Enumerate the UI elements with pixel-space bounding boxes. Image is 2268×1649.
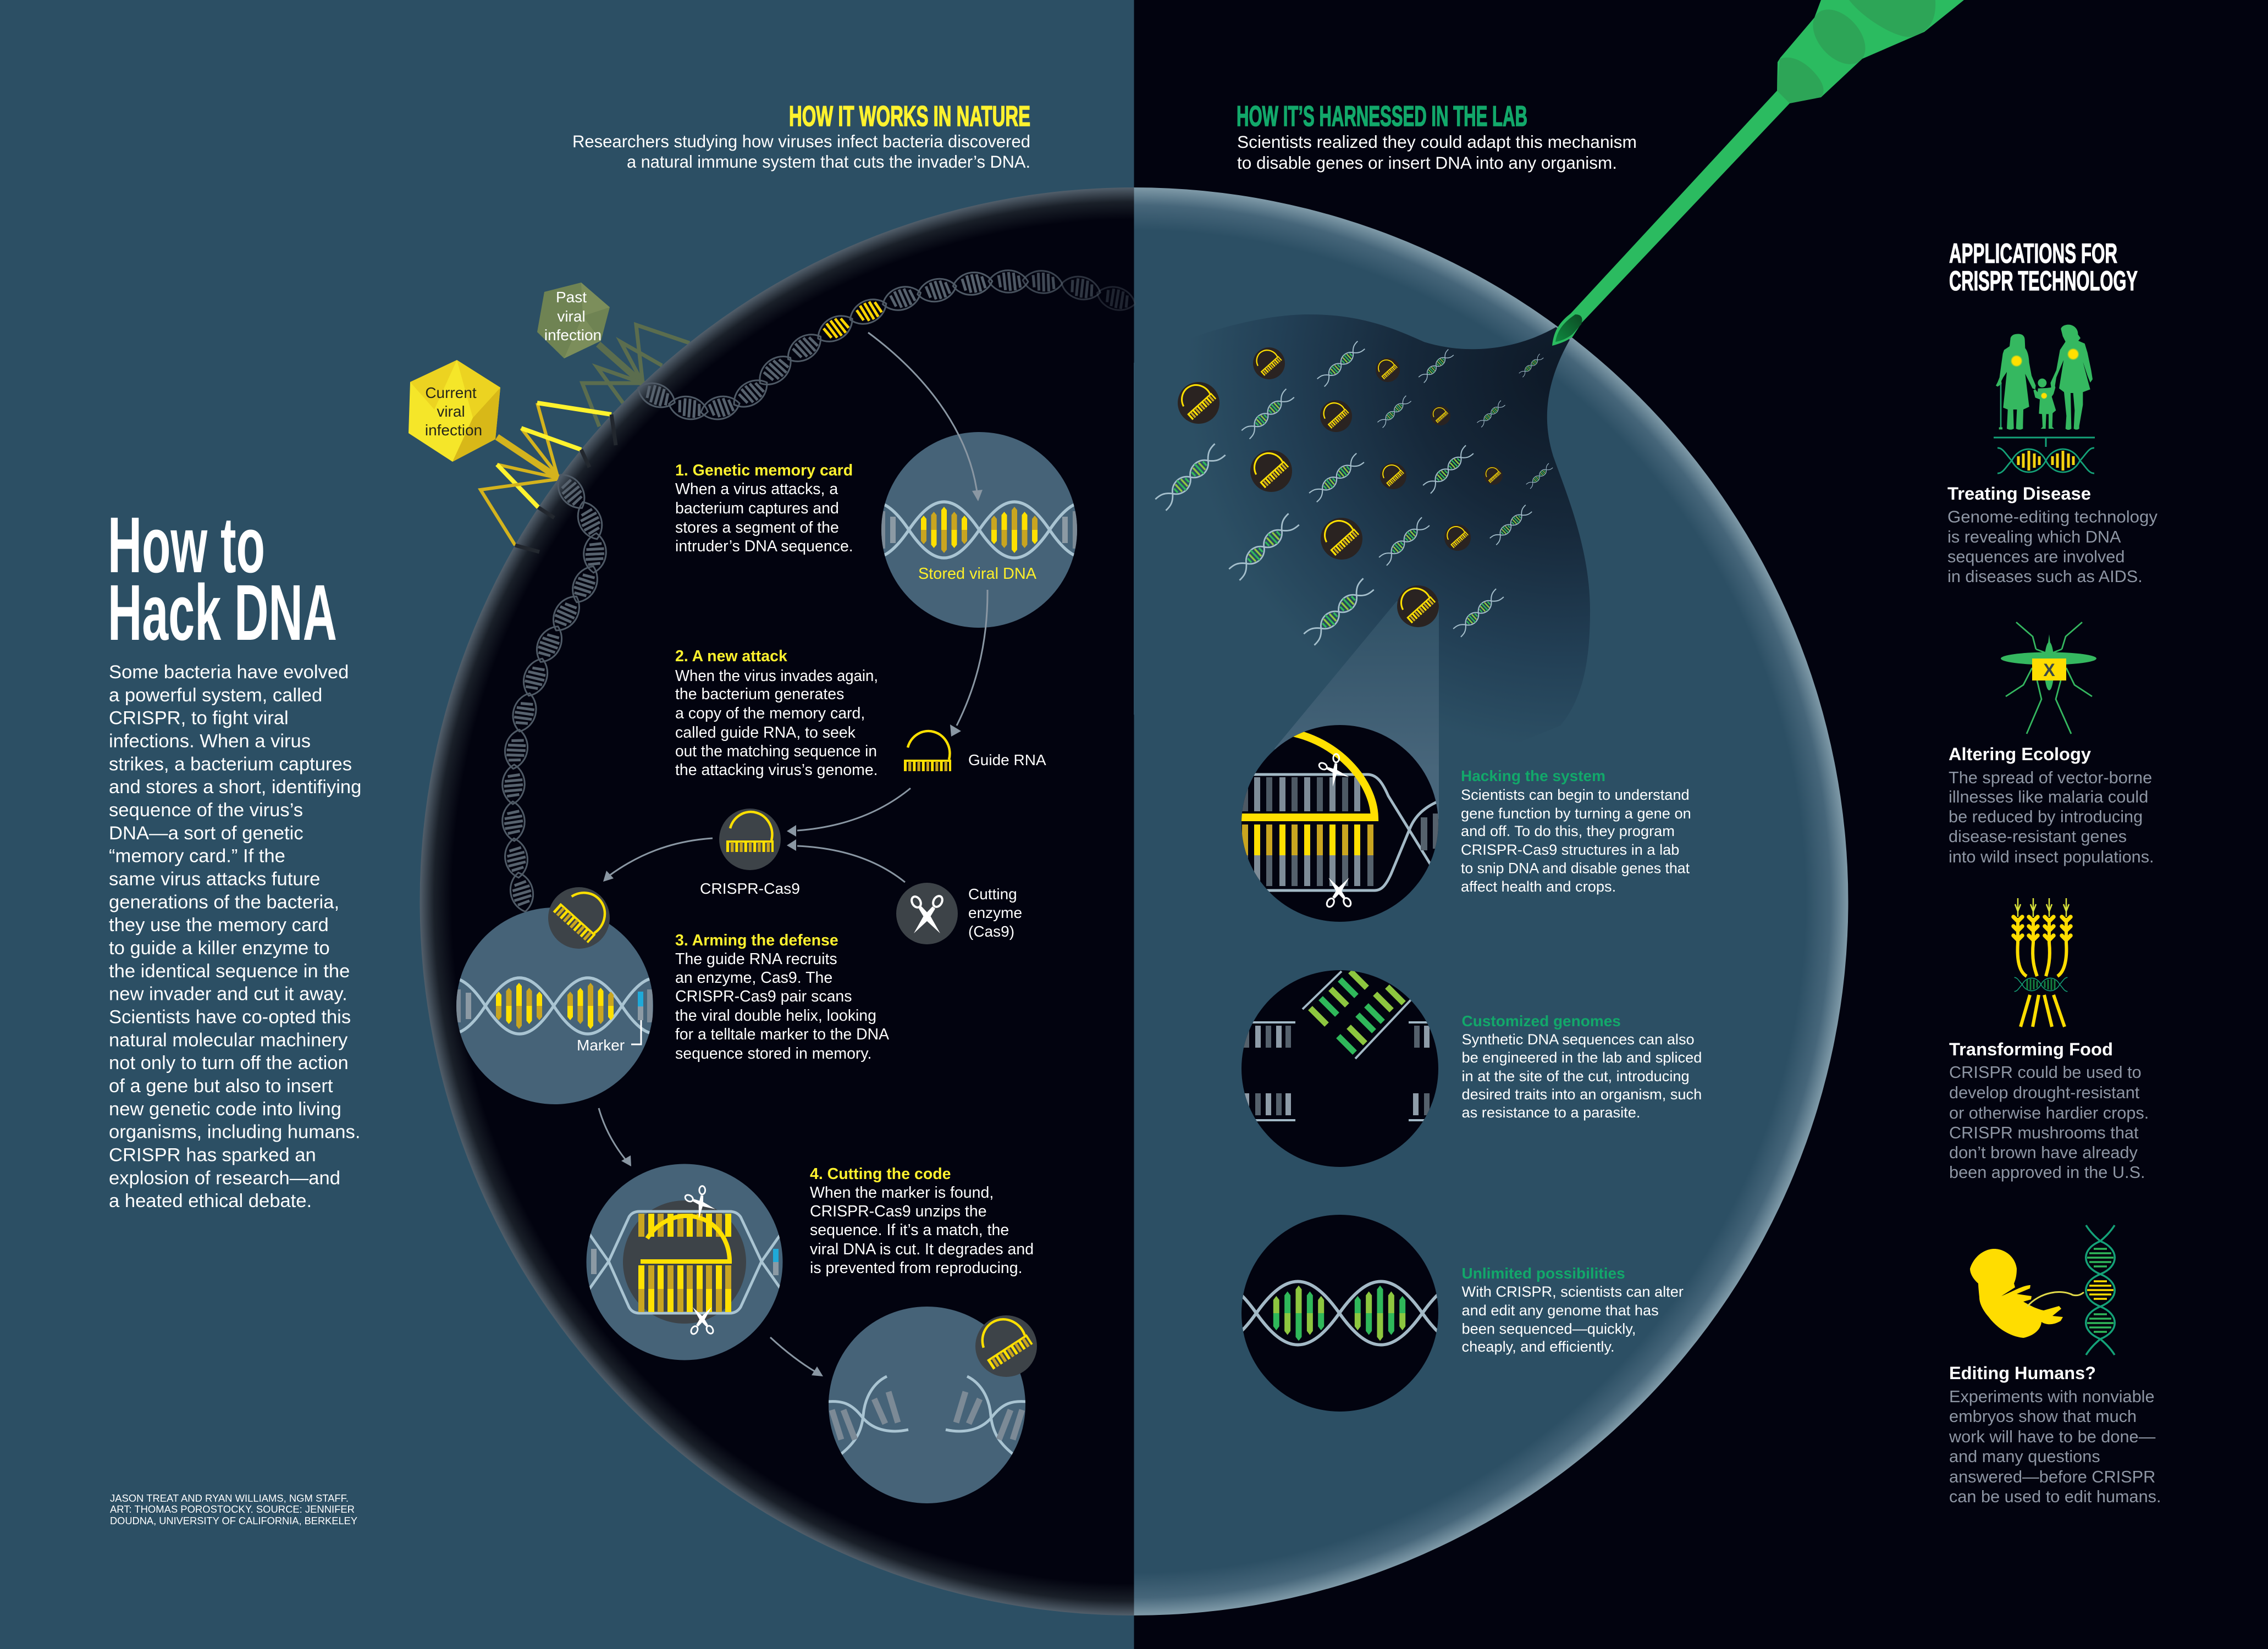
intro text block: they use the memory card xyxy=(109,915,329,936)
title: Hack DNA xyxy=(108,568,337,657)
text: customized genomes: desired traits into an organism, such xyxy=(1461,1086,1702,1103)
step 3 text: sequence stored in memory. xyxy=(675,1045,871,1063)
text: altering ecology xyxy=(1949,744,2154,866)
bacterial DNA strand: lower arc xyxy=(502,469,608,914)
intro text block: to guide a killer enzyme to xyxy=(109,938,330,959)
scattered CRISPR combs xyxy=(1174,345,1503,627)
label: cutting enzyme: (Cas9) xyxy=(968,923,1014,940)
title: How to xyxy=(108,501,265,589)
text: hacking the system: CRISPR-Cas9 structures in a lab xyxy=(1461,841,1679,858)
virus: past viral infection capsid: Past xyxy=(556,289,587,306)
arrow: stored DNA to guide RNA xyxy=(950,590,987,737)
label: CRISPR-Cas9: CRISPR-Cas9 xyxy=(700,880,800,897)
virus: current viral infection capsid: viral xyxy=(437,403,465,420)
intro text block: natural molecular machinery xyxy=(109,1030,348,1050)
step 3 text: The guide RNA recruits xyxy=(675,950,837,968)
step 4 text: 4. Cutting the code xyxy=(810,1165,951,1183)
icon: mosquito: X xyxy=(2043,660,2055,680)
virus: current viral infection capsid xyxy=(409,360,500,462)
text: treating disease: in diseases such as AIDS. xyxy=(1947,567,2143,586)
text: hacking the system: and off. To do this, they program xyxy=(1461,822,1675,839)
step 2 text: the bacterium generates xyxy=(675,685,844,703)
label: cutting enzyme xyxy=(968,886,1022,940)
text: customized genomes: Synthetic DNA sequences can also xyxy=(1461,1031,1695,1048)
bacterium: left half of cell xyxy=(420,187,1134,1615)
step 4 text: CRISPR-Cas9 unzips the xyxy=(810,1203,987,1220)
text: transforming food: Transforming Food xyxy=(1949,1039,2113,1059)
step 2 text: When the virus invades again, xyxy=(675,667,878,685)
circle: hacking the system xyxy=(1237,725,1452,922)
text: altering ecology: disease-resistant genes xyxy=(1949,827,2127,846)
circle: stored viral DNA: Stored viral DNA xyxy=(918,565,1037,583)
text: treating disease: sequences are involved xyxy=(1947,547,2124,566)
virus: past viral infection capsid xyxy=(537,283,610,358)
text: customized genomes: as resistance to a parasite. xyxy=(1461,1104,1640,1121)
subhead: lab xyxy=(1237,132,1637,173)
intro text block: explosion of research—and xyxy=(109,1167,340,1188)
text: unlimited possibilities: been sequenced—quickly, xyxy=(1461,1320,1636,1337)
step 2 text: out the matching sequence in xyxy=(675,743,877,760)
circle: cutting viral DNA xyxy=(583,1164,787,1360)
intro text block: generations of the bacteria, xyxy=(109,892,339,912)
step 1 text: When a virus attacks, a xyxy=(675,480,838,498)
step 2 text: a copy of the memory card, xyxy=(675,705,865,722)
arrow: CRISPR-Cas9 to scan circle xyxy=(603,838,713,882)
intro text block: the identical sequence in the xyxy=(109,961,350,982)
step 4 text: viral DNA is cut. It degrades and xyxy=(810,1241,1034,1258)
text: editing humans: answered—before CRISPR xyxy=(1949,1467,2155,1486)
circle: scanning viral helix xyxy=(456,887,653,1104)
credits: ART: THOMAS POROSTOCKY. SOURCE: JENNIFER xyxy=(110,1504,355,1515)
text: treating disease xyxy=(1947,484,2158,586)
text: editing humans: Editing Humans? xyxy=(1949,1363,2096,1383)
text: editing humans: Experiments with nonviable xyxy=(1949,1387,2155,1406)
text: editing humans xyxy=(1949,1363,2161,1506)
heading: applications: CRISPR TECHNOLOGY xyxy=(1949,265,2138,296)
text: customized genomes: in at the site of the cut, introducing xyxy=(1461,1067,1690,1084)
arrow: cut circle to degraded DNA xyxy=(770,1337,823,1376)
text: altering ecology: The spread of vector-borne xyxy=(1949,768,2152,787)
step 3 text xyxy=(675,932,889,1063)
intro text block: sequence of the virus’s xyxy=(109,800,303,821)
step 3 text: an enzyme, Cas9. The xyxy=(675,969,832,987)
text: customized genomes xyxy=(1461,1012,1702,1121)
heading: applications xyxy=(1949,238,2138,296)
icon: guide RNA xyxy=(904,731,951,766)
icon: mosquito xyxy=(2001,622,2096,734)
heading: applications: APPLICATIONS FOR xyxy=(1949,238,2117,269)
step 2 text: called guide RNA, to seek xyxy=(675,724,856,742)
arrow: scan circle to cut circle xyxy=(599,1108,631,1166)
text: treating disease: is revealing which DNA xyxy=(1947,527,2121,546)
icon: scissors Cas9 xyxy=(896,883,958,944)
text: transforming food: CRISPR mushrooms that xyxy=(1949,1123,2139,1142)
circle: customized genomes xyxy=(1241,970,1438,1167)
intro text block xyxy=(109,662,361,1211)
step 3 text: the viral double helix, looking xyxy=(675,1007,876,1025)
icon: embryo with DNA xyxy=(1970,1225,2115,1355)
text: customized genomes: Customized genomes xyxy=(1461,1012,1621,1030)
label: cutting enzyme: Cutting xyxy=(968,886,1017,903)
step 1 text xyxy=(675,462,853,555)
text: unlimited possibilities: With CRISPR, scientists can alter xyxy=(1461,1283,1684,1300)
step 2 text: the attacking virus’s genome. xyxy=(675,761,878,779)
intro text block: Scientists have co-opted this xyxy=(109,1007,351,1028)
step 2 text: 2. A new attack xyxy=(675,648,787,665)
text: transforming food: been approved in the U.S. xyxy=(1949,1163,2145,1182)
step 1 text: bacterium captures and xyxy=(675,500,839,517)
step 4 text xyxy=(810,1165,1034,1277)
circle: degraded viral DNA xyxy=(827,1307,1037,1503)
intro text block: CRISPR has sparked an xyxy=(109,1144,316,1165)
step 2 text xyxy=(675,648,878,779)
intro text block: of a gene but also to insert xyxy=(109,1076,333,1097)
background: nature side xyxy=(0,0,1134,1649)
label: guide RNA: Guide RNA xyxy=(968,751,1046,768)
intro text block: CRISPR, to fight viral xyxy=(109,708,289,729)
text: hacking the system: Scientists can begin to understand xyxy=(1461,786,1690,803)
icon: family with DNA xyxy=(1994,325,2095,473)
heading: how it works in nature: HOW IT WORKS IN NATURE xyxy=(789,101,1030,132)
credits xyxy=(110,1493,357,1526)
intro text block: new genetic code into living xyxy=(109,1099,341,1120)
virus: current viral infection capsid: Current xyxy=(425,384,477,401)
bacterium: right half of cell xyxy=(1134,187,1848,1615)
darkened region: injected CRISPR spreading in cell xyxy=(1134,314,1590,824)
text: treating disease: Treating Disease xyxy=(1947,484,2091,503)
text: unlimited possibilities: and edit any genome that has xyxy=(1461,1302,1659,1319)
text: altering ecology: Altering Ecology xyxy=(1949,744,2091,764)
circle: unlimited possibilities xyxy=(1241,1215,1438,1412)
text: unlimited possibilities: cheaply, and efficiently. xyxy=(1461,1338,1615,1355)
virus: current viral infection tail xyxy=(481,403,616,552)
title xyxy=(108,501,337,657)
text: hacking the system: Hacking the system xyxy=(1461,767,1605,784)
circle: scanning viral helix: Marker xyxy=(577,1037,625,1054)
step 4 text: sequence. If it’s a match, the xyxy=(810,1221,1009,1239)
intro text block: and stores a short, identifiying xyxy=(109,777,361,798)
intro text block: Some bacteria have evolved xyxy=(109,662,349,683)
heading: how it's harnessed in the lab: HOW IT’S HARNESSED IN THE LAB xyxy=(1237,101,1527,132)
text: editing humans: and many questions xyxy=(1949,1447,2100,1466)
virus: past viral infection tail xyxy=(582,325,689,427)
intro text block: new invader and cut it away. xyxy=(109,984,347,1005)
icon: CRISPR-Cas9 xyxy=(719,809,781,870)
text: hacking the system: to snip DNA and disable genes that xyxy=(1461,860,1690,876)
beam: from comb to hacking circle xyxy=(1274,601,1439,819)
arrow: guide RNA to CRISPR-Cas9 xyxy=(787,788,910,837)
label: cutting enzyme: enzyme xyxy=(968,904,1022,921)
subhead: nature: a natural immune system that cuts the invader’s DNA. xyxy=(627,152,1030,171)
text: editing humans: can be used to edit humans. xyxy=(1949,1487,2161,1506)
text: editing humans: embryos show that much xyxy=(1949,1407,2137,1426)
text: unlimited possibilities: Unlimited possibilities xyxy=(1461,1265,1625,1282)
text: hacking the system: affect health and crops. xyxy=(1461,878,1616,895)
text: transforming food: CRISPR could be used to xyxy=(1949,1063,2142,1082)
step 4 text: When the marker is found, xyxy=(810,1184,994,1202)
intro text block: strikes, a bacterium captures xyxy=(109,754,352,774)
intro text block: infections. When a virus xyxy=(109,731,311,752)
step 3 text: 3. Arming the defense xyxy=(675,932,838,949)
icon: wheat with DNA xyxy=(2013,898,2071,1027)
credits: JASON TREAT AND RYAN WILLIAMS, NGM STAFF. xyxy=(110,1493,349,1504)
virus: current viral infection capsid: infection xyxy=(425,422,482,439)
text: transforming food: or otherwise hardier crops. xyxy=(1949,1103,2149,1122)
subhead: nature: Researchers studying how viruses infect bacteria discovered xyxy=(572,132,1030,151)
intro text block: organisms, including humans. xyxy=(109,1122,360,1143)
text: altering ecology: into wild insect populations. xyxy=(1949,847,2154,866)
intro text block: a powerful system, called xyxy=(109,685,322,706)
intro text block: a heated ethical debate. xyxy=(109,1191,312,1211)
virus: past viral infection capsid: viral xyxy=(557,308,586,325)
step 3 text: for a telltale marker to the DNA xyxy=(675,1026,889,1043)
arrow: strand to stored DNA xyxy=(868,333,983,501)
text: transforming food: develop drought-resistant xyxy=(1949,1083,2140,1102)
text: hacking the system: gene function by turning a gene on xyxy=(1461,805,1691,822)
intro text block: DNA—a sort of genetic xyxy=(109,823,303,844)
credits: DOUDNA, UNIVERSITY OF CALIFORNIA, BERKELEY xyxy=(110,1515,357,1526)
intro text block: same virus attacks future xyxy=(109,868,320,889)
text: treating disease: Genome-editing technology xyxy=(1947,507,2158,527)
text: transforming food xyxy=(1949,1039,2149,1182)
text: hacking the system xyxy=(1461,767,1691,895)
virus: past viral infection capsid: infection xyxy=(544,327,602,344)
step 1 text: 1. Genetic memory card xyxy=(675,462,853,479)
step 4 text: is prevented from reproducing. xyxy=(810,1259,1023,1277)
intro text block: not only to turn off the action xyxy=(109,1053,349,1073)
step 1 text: stores a segment of the xyxy=(675,519,839,536)
intro text block: “memory card.” If the xyxy=(109,846,285,867)
subhead: nature xyxy=(572,132,1030,171)
text: altering ecology: be reduced by introducing xyxy=(1949,807,2143,826)
background: lab side xyxy=(1134,0,2268,1649)
text: unlimited possibilities xyxy=(1461,1265,1684,1355)
step 3 text: CRISPR-Cas9 pair scans xyxy=(675,988,852,1005)
bacterial DNA strand: upper arc xyxy=(634,269,1138,423)
text: altering ecology: illnesses like malaria could xyxy=(1949,787,2148,806)
text: editing humans: work will have to be done— xyxy=(1949,1427,2156,1446)
text: customized genomes: be engineered in the lab and spliced xyxy=(1461,1049,1702,1066)
arrow: Cas9 to CRISPR-Cas9 xyxy=(787,839,905,882)
subhead: lab: to disable genes or insert DNA into any organism. xyxy=(1237,153,1617,173)
syringe needle xyxy=(1552,0,1964,346)
text: transforming food: don’t brown have already xyxy=(1949,1143,2138,1162)
scattered DNA helices xyxy=(1155,341,1553,645)
step 1 text: intruder’s DNA sequence. xyxy=(675,538,853,555)
subhead: lab: Scientists realized they could adapt this mechanism xyxy=(1237,132,1637,152)
circle: stored viral DNA xyxy=(881,432,1077,628)
